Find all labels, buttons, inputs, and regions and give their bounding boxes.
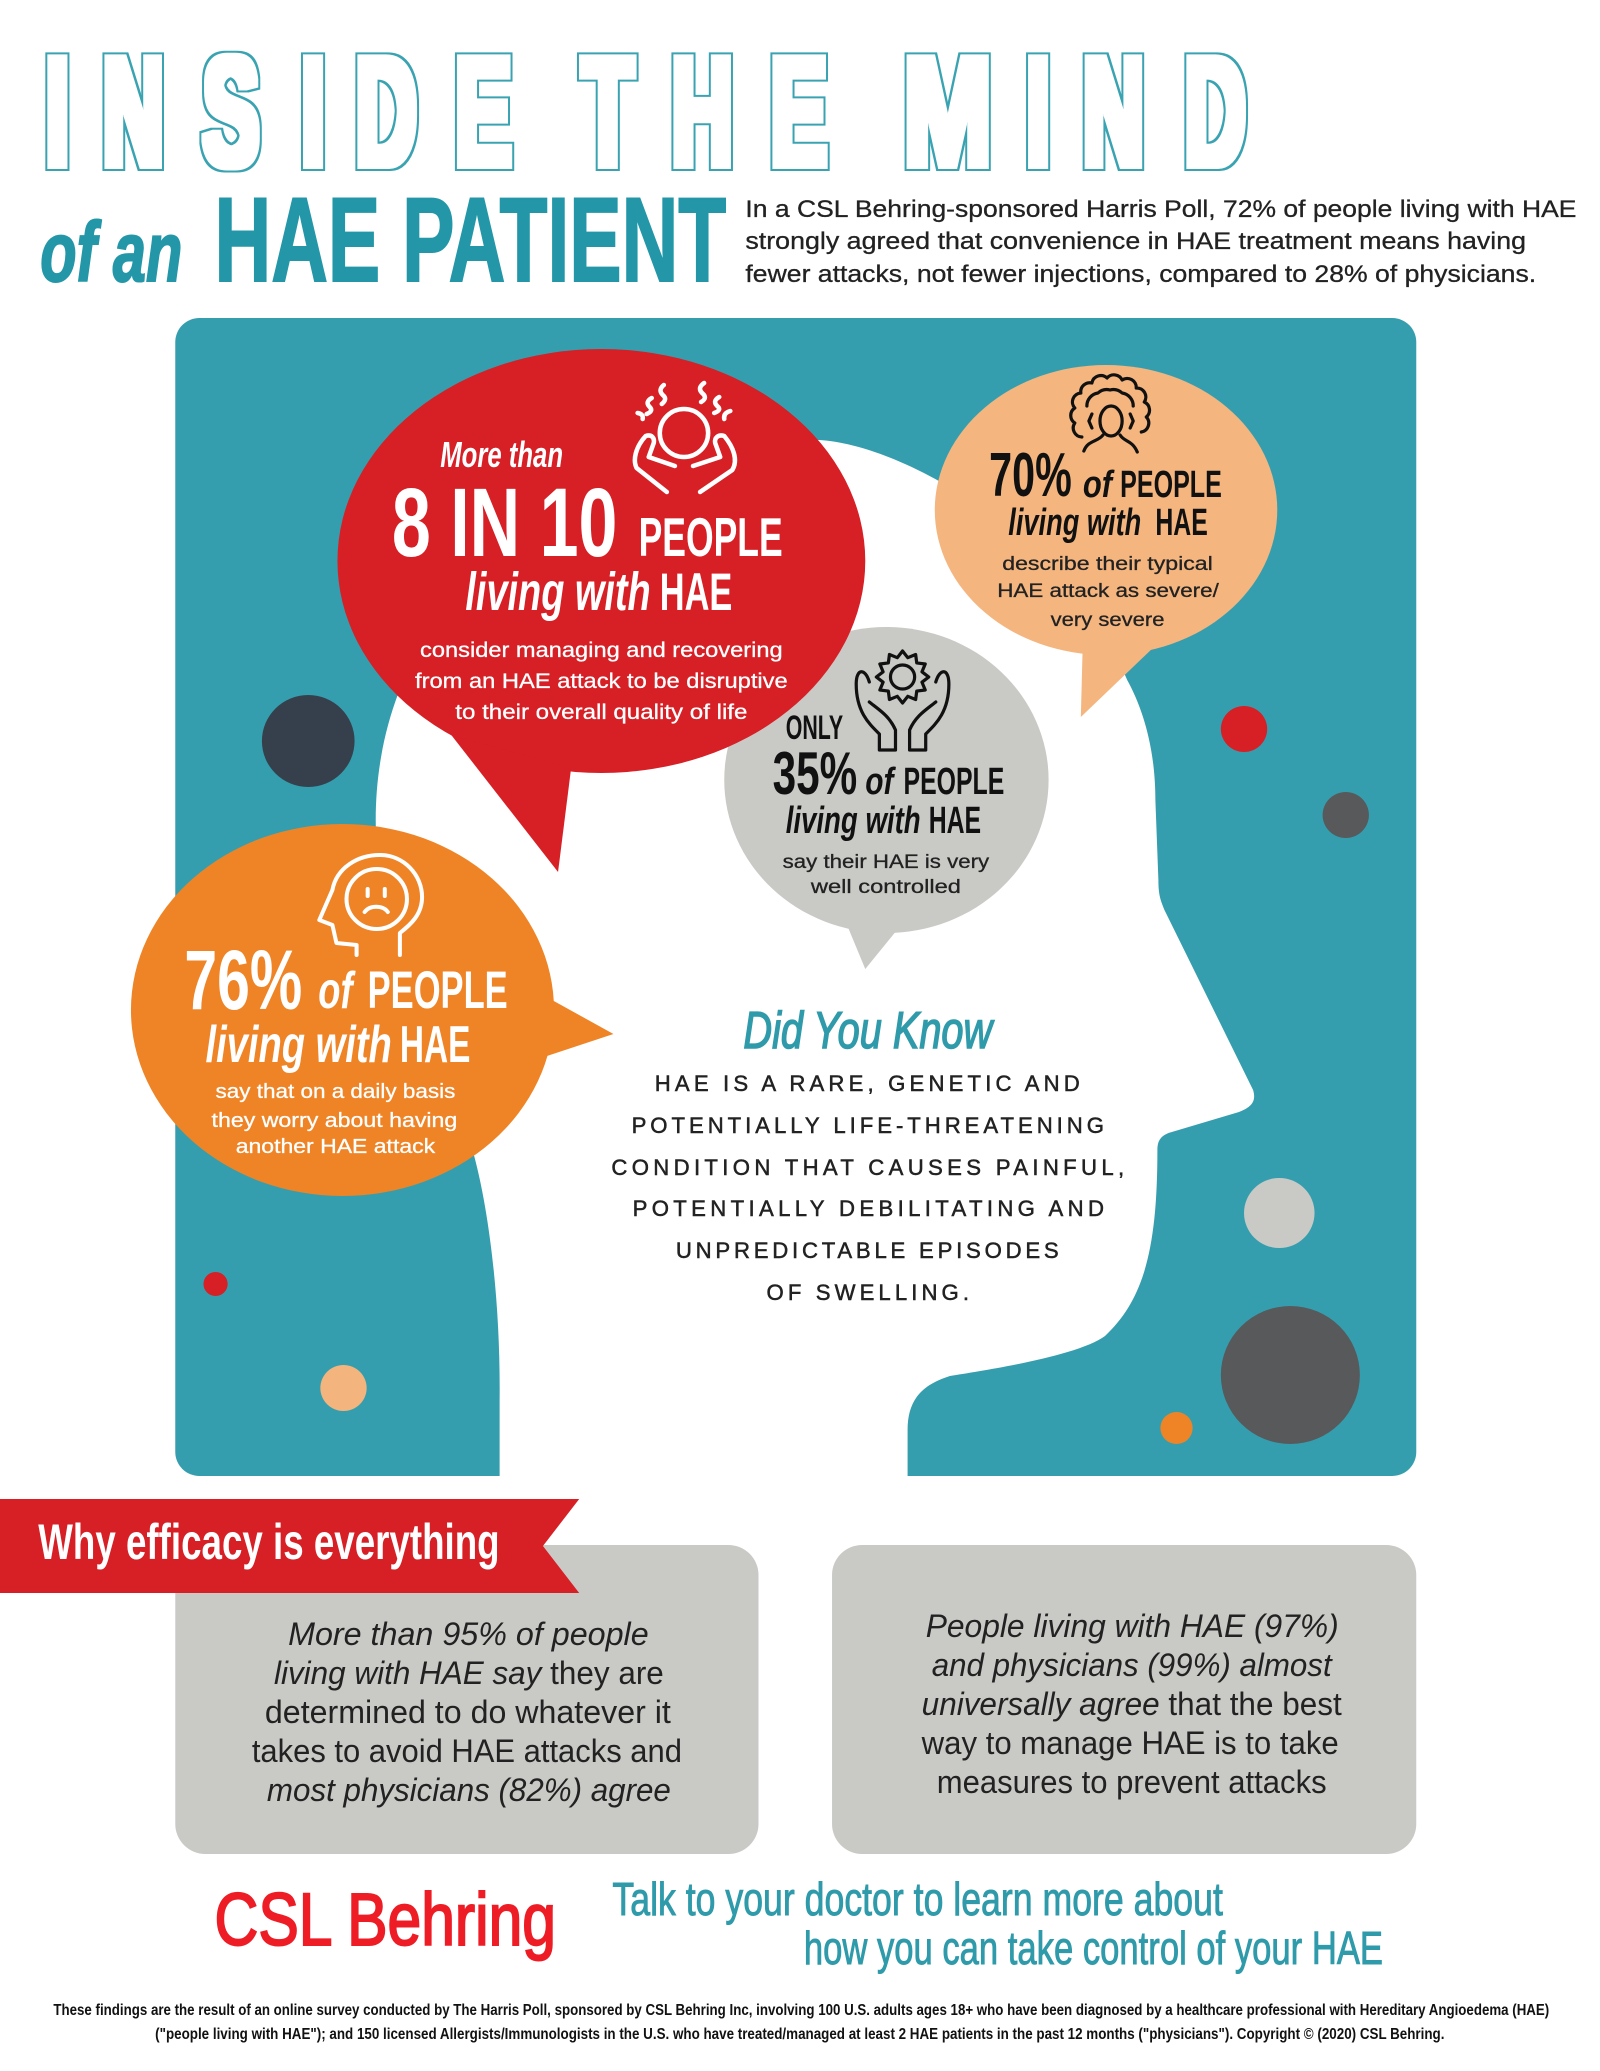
stat heading: living with	[205, 1016, 392, 1074]
head silhouette	[376, 440, 1254, 1476]
stat description: very severe	[1051, 609, 1165, 631]
panel: right efficacy card: universally agree that the best	[922, 1686, 1342, 1722]
text block: HAE definition: HAE IS A RARE, GENETIC AND	[655, 1071, 1080, 1096]
icon: sad face in head	[319, 855, 422, 955]
subtitle: of an HAE PATIENT: HAE PATIENT	[215, 172, 726, 307]
stat description: HAE attack as severe/	[997, 580, 1219, 602]
title: INSIDE THE MIND	[46, 26, 1246, 199]
stat heading	[989, 441, 1222, 544]
stat heading: PEOPLE	[639, 506, 783, 568]
title: INSIDE THE MIND: M	[903, 26, 992, 199]
call to action: how you can take control of your HAE	[804, 1922, 1383, 1974]
stat heading: living with	[786, 799, 921, 842]
panel: left efficacy card: More than 95% of people	[288, 1616, 649, 1652]
stat description: describe their typical	[1002, 553, 1213, 575]
subtitle: of an HAE PATIENT: of an	[40, 205, 182, 299]
stat heading: HAE	[400, 1016, 470, 1074]
callout: 8 in 10 red bubble	[337, 349, 865, 872]
stat description: say their HAE is very	[783, 851, 989, 873]
stat heading: living with	[465, 562, 651, 622]
stat heading: PEOPLE	[904, 760, 1004, 803]
stat heading: of	[318, 962, 356, 1020]
stat heading	[392, 434, 783, 622]
panel: right efficacy card: way to manage HAE is to take	[921, 1725, 1339, 1761]
stat description: they worry about having	[212, 1110, 457, 1132]
text block: HAE definition: OF SWELLING.	[767, 1280, 969, 1305]
ribbon: Why efficacy is everything: Why efficacy is everything	[38, 1514, 500, 1570]
title: INSIDE THE MIND: IND	[1026, 26, 1246, 199]
stat heading: PEOPLE	[1120, 463, 1222, 506]
stat heading: living with	[1008, 501, 1141, 544]
panel: left efficacy card: determined to do whatever it	[265, 1694, 671, 1730]
callout: 35% grey bubble	[724, 627, 1049, 969]
stat heading: HAE	[1155, 501, 1208, 544]
panel: right efficacy card: and physicians (99%) almost	[932, 1647, 1334, 1683]
stat description: from an HAE attack to be disruptive	[415, 670, 788, 693]
callout: 70% peach bubble	[935, 365, 1277, 717]
icon: person with frizzy aura	[1071, 375, 1150, 452]
stat heading: PEOPLE	[368, 961, 508, 1020]
stat heading: 76%	[184, 933, 302, 1027]
ribbon: Why efficacy is everything	[0, 1499, 579, 1593]
stat heading	[184, 933, 508, 1074]
stat heading: 8 IN 10	[392, 468, 617, 577]
intro text: In a CSL Behring-sponsored Harris Poll, 72% of people living with HAE	[745, 196, 1576, 223]
panel: left efficacy card: most physicians (82%) agree	[267, 1772, 671, 1808]
stat description	[212, 1081, 457, 1158]
text block: HAE definition: UNPREDICTABLE EPISODES	[676, 1238, 1059, 1263]
heading: Did You Know: Did You Know	[743, 1002, 995, 1060]
stat description: another HAE attack	[236, 1136, 436, 1158]
panel: left efficacy card	[175, 1545, 758, 1854]
stat description: well controlled	[810, 876, 961, 898]
stat heading: ONLY	[786, 709, 843, 747]
stat description: say that on a daily basis	[216, 1081, 455, 1103]
footnote	[53, 2001, 1549, 2043]
stat description	[783, 851, 989, 898]
panel: teal head background	[175, 318, 1416, 1476]
text block: HAE definition: POTENTIALLY LIFE-THREATENING	[632, 1113, 1104, 1138]
panel: right efficacy card	[832, 1545, 1416, 1854]
icon: gear in hands	[856, 651, 949, 750]
subtitle: of an HAE PATIENT	[40, 172, 726, 307]
intro text: strongly agreed that convenience in HAE treatment means having	[745, 228, 1526, 255]
text block: HAE definition	[611, 1071, 1124, 1305]
text block: HAE definition: CONDITION THAT CAUSES PAINFUL,	[611, 1155, 1124, 1180]
panel: right efficacy card: People living with HAE (97%)	[926, 1608, 1339, 1644]
stat description	[415, 639, 788, 724]
stat heading: More than	[440, 434, 563, 475]
logo: CSL Behring: CSL Behring	[215, 1878, 556, 1961]
stat description: to their overall quality of life	[455, 701, 747, 724]
call to action	[612, 1873, 1383, 1974]
intro text	[745, 196, 1576, 288]
stat heading: 35%	[773, 739, 857, 807]
call to action: Talk to your doctor to learn more about	[612, 1873, 1223, 1925]
stat heading: of	[1083, 463, 1115, 506]
decorative dots	[203, 695, 1369, 1444]
stat description	[997, 553, 1219, 631]
panel: left efficacy card: living with HAE say they are	[274, 1655, 664, 1691]
icon: head in hands	[635, 383, 735, 492]
callout: 76% orange bubble	[131, 824, 613, 1196]
stat heading: of	[865, 760, 896, 803]
stat heading: HAE	[929, 799, 981, 842]
panel: right efficacy card: measures to prevent attacks	[937, 1764, 1327, 1800]
stat heading: HAE	[660, 563, 732, 622]
stat heading: 70%	[989, 441, 1072, 510]
text block: HAE definition: POTENTIALLY DEBILITATING AND	[633, 1196, 1104, 1221]
intro text: fewer attacks, not fewer injections, compared to 28% of physicians.	[745, 261, 1536, 288]
stat heading	[773, 709, 1004, 842]
title: INSIDE THE MIND: INSIDE THE	[46, 26, 827, 199]
panel: left efficacy card: takes to avoid HAE attacks and	[252, 1733, 682, 1769]
stat description: consider managing and recovering	[420, 639, 783, 662]
